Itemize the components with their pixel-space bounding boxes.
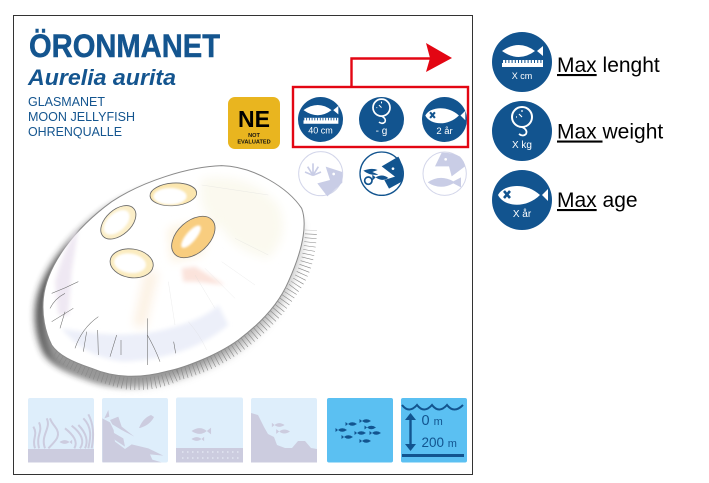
icon: diet benthic animals (inactive) — [299, 152, 343, 196]
habitat tile: depth range 0-200 m: 0 m — [422, 413, 443, 429]
common names: OHRENQUALLE — [28, 124, 122, 139]
icon: max age 2 years: 2 år — [436, 126, 453, 137]
legend: max age: X år — [513, 208, 532, 220]
habitat tile: open water school (active) — [327, 398, 393, 462]
conservation badge: not evaluated: NOT — [248, 133, 260, 139]
icon: max weight — [359, 97, 404, 142]
habitat tile: rocky slope — [251, 398, 317, 462]
red highlight box — [293, 87, 468, 147]
habitat tile: sandy bottom — [176, 398, 243, 462]
legend: max age — [492, 170, 638, 230]
common names: GLASMANET — [28, 94, 105, 109]
habitat tile: seagrass — [28, 398, 94, 462]
habitat tile: kelp reef — [102, 398, 168, 462]
legend: max weight: X kg — [512, 140, 532, 151]
scientific name: Aurelia aurita — [27, 65, 176, 90]
habitat tile: depth range 0-200 m: 200 m — [422, 435, 457, 450]
legend: max length: X cm — [512, 71, 532, 81]
conservation badge: not evaluated: EVALUATED — [237, 140, 271, 146]
legend: max weight: Max weight — [557, 120, 663, 144]
jellyfish illustration — [35, 166, 311, 388]
conservation badge: not evaluated: NE — [238, 106, 270, 132]
common names: MOON JELLYFISH — [28, 109, 135, 124]
habitat tile: depth range 0-200 m — [401, 398, 467, 462]
icon: max length 40 cm: 40 cm — [308, 126, 333, 136]
title: ÖRONMANET — [29, 28, 220, 64]
icon: max age 2 years — [422, 97, 467, 142]
legend: max age: Max age — [557, 189, 638, 212]
conservation badge: not evaluated — [228, 97, 280, 149]
common names — [28, 94, 135, 139]
icon: max length 40 cm — [298, 97, 343, 142]
icon: diet fish and invertebrates (active) — [360, 152, 403, 195]
legend: max weight — [492, 101, 663, 161]
legend: max length: Max lenght — [557, 54, 660, 77]
legend: max length — [492, 32, 660, 92]
icon: diet fish predator (inactive) — [423, 152, 466, 195]
icon: max weight: - g — [376, 126, 387, 137]
red arrow — [352, 43, 452, 87]
card frame — [14, 16, 472, 474]
